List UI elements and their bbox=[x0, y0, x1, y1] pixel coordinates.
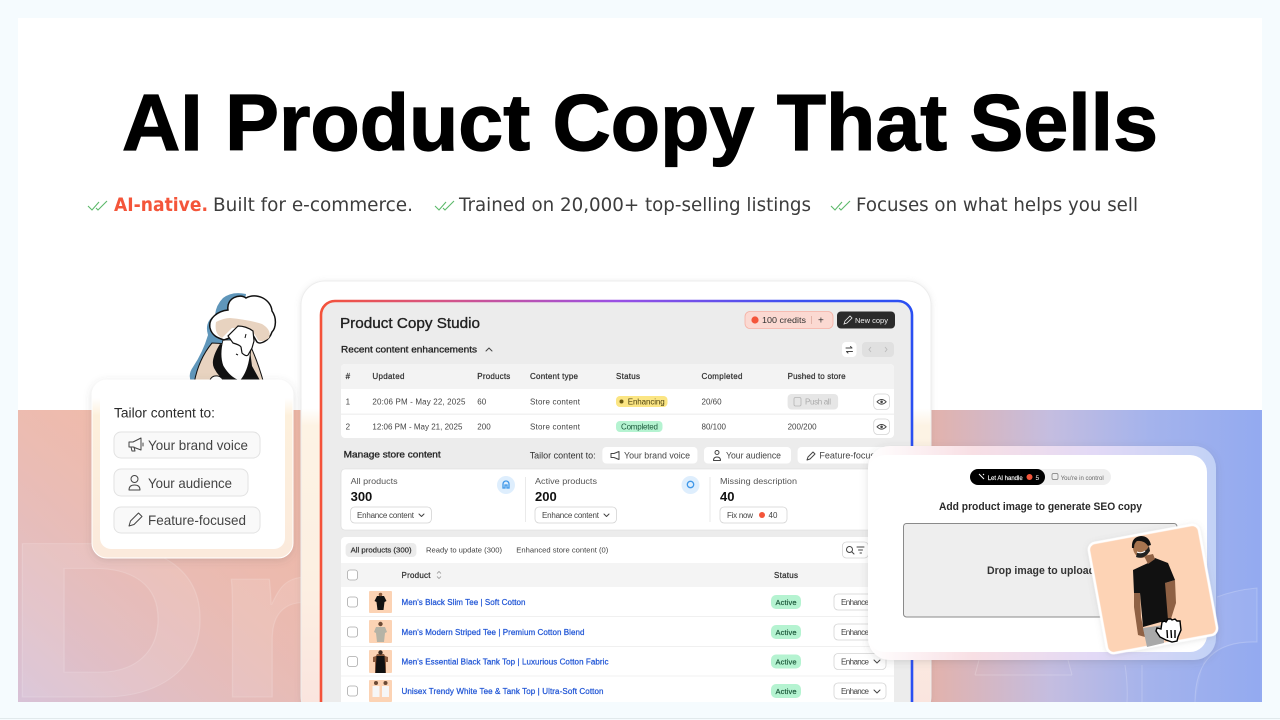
ghost lettering bbox=[22, 544, 1258, 702]
panel: tablet shell bbox=[301, 281, 931, 720]
feature: trained on listings: Trained on 20,000+ top-selling listings bbox=[458, 194, 811, 216]
tabs: All products (300) bbox=[351, 546, 412, 554]
table: recent enhancements: 20:06 PM - May 22, 2025 bbox=[372, 398, 466, 406]
table header: Product bbox=[402, 571, 431, 580]
face bbox=[228, 326, 254, 356]
table: recent enhancements: Completed bbox=[702, 372, 742, 381]
arms bbox=[1134, 580, 1176, 637]
chip: your audience bbox=[114, 469, 248, 496]
product row 4: Active bbox=[776, 687, 796, 696]
table: recent enhancements: Pushed to store bbox=[788, 372, 846, 381]
heading: manage store content: Manage store content bbox=[344, 450, 441, 460]
product row 2: Men's Modern Striped Tee | Premium Cotton Blend bbox=[402, 628, 584, 637]
stats card bbox=[341, 469, 894, 530]
table: recent enhancements: Updated bbox=[372, 372, 404, 381]
product row 4 bbox=[348, 680, 886, 702]
table header: Status bbox=[774, 571, 798, 580]
beard bbox=[221, 340, 252, 381]
hand bbox=[210, 376, 224, 384]
heading: recent content enhancements bbox=[342, 346, 492, 353]
product row 1: Active bbox=[776, 598, 796, 607]
product row 4: Unisex Trendy White Tee & Tank Top | Ultra-Soft Cotton bbox=[402, 687, 604, 696]
tailor content chips: Tailor content to: bbox=[530, 450, 596, 460]
eye button 2 bbox=[874, 419, 890, 434]
icon: double check 3 bbox=[831, 201, 850, 210]
tee bbox=[1133, 558, 1175, 627]
eye button 1 bbox=[874, 394, 890, 410]
heading: recent content enhancements: Recent content enhancements bbox=[341, 344, 477, 356]
panel: tailor content card bbox=[92, 380, 293, 558]
stat: missing description: Missing description bbox=[720, 476, 797, 486]
drop zone bbox=[904, 524, 1177, 617]
chip: your audience: Your audience bbox=[148, 475, 232, 491]
blue shadow bbox=[190, 293, 246, 384]
product row 3 bbox=[348, 650, 886, 673]
tabs: Ready to update (300) bbox=[426, 546, 503, 554]
table: recent enhancements: Products bbox=[477, 372, 510, 381]
man in black tee bbox=[1131, 536, 1176, 647]
stat: all products: All products bbox=[351, 476, 398, 486]
feature: built for e-commerce: Built for e-commerce. bbox=[213, 194, 413, 216]
feature: focuses on selling: Focuses on what helps you sell bbox=[856, 194, 1138, 216]
title: AI Product Copy That Sells bbox=[122, 78, 1158, 167]
heading: Product Copy Studio: Product Copy Studio bbox=[340, 315, 480, 332]
product row 4: Enhance bbox=[841, 687, 870, 696]
product table card bbox=[341, 537, 894, 707]
chip: your brand voice: Your brand voice bbox=[148, 437, 248, 453]
stat: missing description: 40 bbox=[768, 511, 778, 520]
chip: your brand voice bbox=[114, 432, 260, 458]
push all button: Push all bbox=[805, 398, 831, 406]
illustration: thinking character bbox=[190, 293, 275, 384]
stat: active products: Active products bbox=[535, 476, 597, 486]
dark garment bbox=[213, 344, 262, 384]
product row 1 bbox=[348, 591, 886, 613]
feature: AI-native: AI-native. bbox=[114, 194, 208, 216]
credits pill bbox=[745, 312, 833, 328]
icon: double check 1 bbox=[88, 201, 107, 210]
table: recent enhancements: Store content bbox=[530, 422, 581, 432]
status: enhancing: Enhancing bbox=[628, 398, 665, 406]
product row 1: Enhance bbox=[841, 598, 870, 607]
table: recent enhancements: 200/200 bbox=[788, 422, 817, 432]
drop zone: Drop image to upload bbox=[987, 565, 1095, 577]
gradient band bbox=[18, 410, 1262, 702]
card heading: Tailor content to: bbox=[114, 406, 215, 420]
stat: missing description: 40 bbox=[720, 489, 734, 504]
table: recent enhancements: 60 bbox=[477, 398, 487, 406]
refresh and pager buttons bbox=[842, 342, 894, 357]
bottom margin bbox=[0, 702, 1280, 720]
stat: active products bbox=[535, 476, 700, 523]
modal heading: Add product image to generate SEO copy bbox=[939, 501, 1143, 513]
tailor content chips bbox=[530, 447, 893, 464]
product row 2: Enhance bbox=[841, 628, 870, 637]
status: enhancing bbox=[616, 396, 668, 407]
table: recent enhancements: Content type bbox=[530, 372, 579, 381]
product row 3: Enhance bbox=[841, 658, 870, 666]
product photo card bbox=[1088, 524, 1218, 654]
hair shadow band bbox=[216, 318, 270, 341]
credits pill: 100 credits bbox=[762, 315, 806, 325]
table: recent enhancements: 200 bbox=[477, 422, 491, 432]
mode toggle bbox=[970, 469, 1111, 485]
mode toggle: Let AI handle bbox=[988, 475, 1023, 482]
product row 3: Active bbox=[776, 658, 796, 666]
push all button bbox=[788, 394, 838, 410]
product row 2: Active bbox=[776, 628, 796, 637]
table: recent enhancements: 80/100 bbox=[702, 422, 727, 432]
tailor content chips: Feature-focused bbox=[819, 450, 885, 460]
table: recent enhancements: 12:06 PM - May 21, 2025 bbox=[372, 422, 463, 432]
chip: feature-focused bbox=[114, 507, 260, 533]
tailor content chips: Your brand voice bbox=[624, 450, 690, 460]
panel: product copy studio screen bbox=[321, 301, 912, 718]
stat: all products bbox=[351, 476, 515, 523]
trousers bbox=[1143, 625, 1164, 647]
mode toggle: You're in control bbox=[1061, 475, 1104, 482]
table: recent enhancements: 20/60 bbox=[702, 398, 722, 406]
tailor content chips: Your audience bbox=[726, 450, 781, 460]
status: completed bbox=[616, 421, 662, 432]
credits pill: + bbox=[818, 316, 824, 326]
chip: feature-focused: Feature-focused bbox=[148, 512, 246, 528]
table header bbox=[348, 570, 798, 580]
stat: active products: Enhance content bbox=[542, 511, 600, 520]
neck and head bbox=[1144, 554, 1155, 564]
panel: upload modal bbox=[868, 446, 1216, 660]
stat: active products: 200 bbox=[535, 489, 557, 504]
product row 3: Men's Essential Black Tank Top | Luxurious Cotton Fabric bbox=[402, 658, 608, 666]
feature list bbox=[88, 194, 1138, 216]
body bbox=[194, 343, 264, 384]
new copy button bbox=[837, 312, 895, 328]
tabs bbox=[346, 543, 609, 557]
product row 2 bbox=[348, 620, 886, 643]
stat: missing description bbox=[720, 476, 797, 523]
icon: grabbing hand cursor bbox=[1156, 619, 1181, 642]
product row 1: Men's Black Slim Tee | Soft Cotton bbox=[402, 598, 526, 607]
mode toggle: 5 bbox=[1036, 475, 1040, 482]
new copy button: New copy bbox=[855, 316, 888, 325]
stat: all products: Enhance content bbox=[357, 511, 415, 520]
tabs: Enhanced store content (0) bbox=[516, 546, 609, 554]
stat: missing description: Fix now bbox=[727, 511, 753, 520]
table: recent enhancements: # bbox=[346, 372, 351, 381]
table: recent enhancements bbox=[341, 364, 894, 438]
table: recent enhancements: Store content bbox=[530, 398, 581, 406]
table: recent enhancements: 2 bbox=[346, 422, 351, 432]
hair bbox=[210, 296, 275, 343]
stat: all products: 300 bbox=[351, 489, 372, 504]
table: recent enhancements: Status bbox=[616, 372, 640, 381]
icon: double check 2 bbox=[435, 201, 454, 210]
status: completed: Completed bbox=[621, 422, 658, 432]
search filter button bbox=[842, 542, 868, 558]
table: recent enhancements: 1 bbox=[346, 398, 351, 406]
